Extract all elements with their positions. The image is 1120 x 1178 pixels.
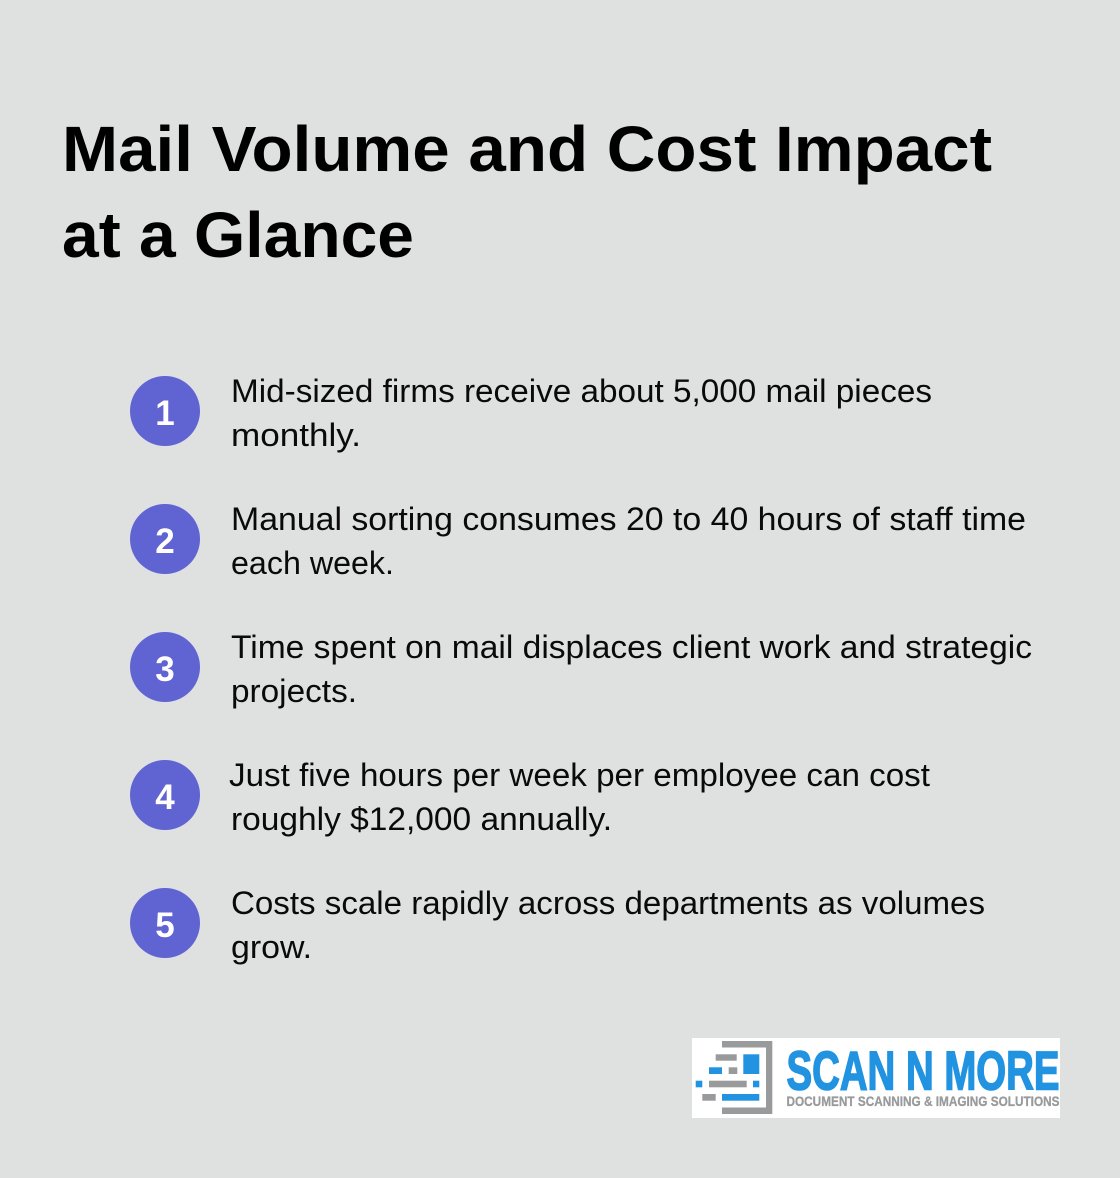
text: item 4: Just five hours per week per employee can cost xyxy=(229,757,930,793)
text: item 4: roughly $12,000 annually. xyxy=(231,801,612,837)
number badge 4: 4 xyxy=(155,778,175,817)
number badge 3: 3 xyxy=(155,650,175,689)
list item 5 xyxy=(130,885,985,965)
number badge 2: 2 xyxy=(155,522,175,561)
number badge 1: 1 xyxy=(155,394,175,433)
list item 1 xyxy=(130,373,932,453)
text: item 3: Time spent on mail displaces client work and strategic xyxy=(231,629,1032,665)
text: item 5: Costs scale rapidly across departments as volumes xyxy=(231,885,985,921)
list item 3 xyxy=(130,629,1032,709)
text: item 5: grow. xyxy=(231,929,312,965)
list item 2 xyxy=(130,501,1026,581)
text: item 5 xyxy=(231,885,985,965)
text: item 2 xyxy=(231,501,1026,581)
text: item 2: Manual sorting consumes 20 to 40 hours of staff time xyxy=(231,501,1026,537)
number badge 1 xyxy=(130,376,200,446)
text: item 1: Mid-sized firms receive about 5,000 mail pieces xyxy=(231,373,932,409)
title: at a Glance xyxy=(62,199,414,271)
list item 4 xyxy=(130,757,930,837)
text: item 3 xyxy=(231,629,1032,709)
text: item 4 xyxy=(229,757,930,837)
number badge 5 xyxy=(130,888,200,958)
number badge 3 xyxy=(130,632,200,702)
icon: scanner bracket and data blocks xyxy=(696,1041,772,1114)
logo tagline: DOCUMENT SCANNING & IMAGING SOLUTIONS xyxy=(786,1093,1060,1109)
number badge 5: 5 xyxy=(155,906,175,945)
title xyxy=(62,113,992,271)
text: item 3: projects. xyxy=(231,673,357,709)
number badge 4 xyxy=(130,760,200,830)
text: item 1: monthly. xyxy=(231,417,361,453)
text: item 1 xyxy=(231,373,932,453)
logo: Scan N More xyxy=(692,1038,1060,1118)
number badge 2 xyxy=(130,504,200,574)
title: Mail Volume and Cost Impact xyxy=(62,113,992,185)
text: item 2: each week. xyxy=(231,545,394,581)
